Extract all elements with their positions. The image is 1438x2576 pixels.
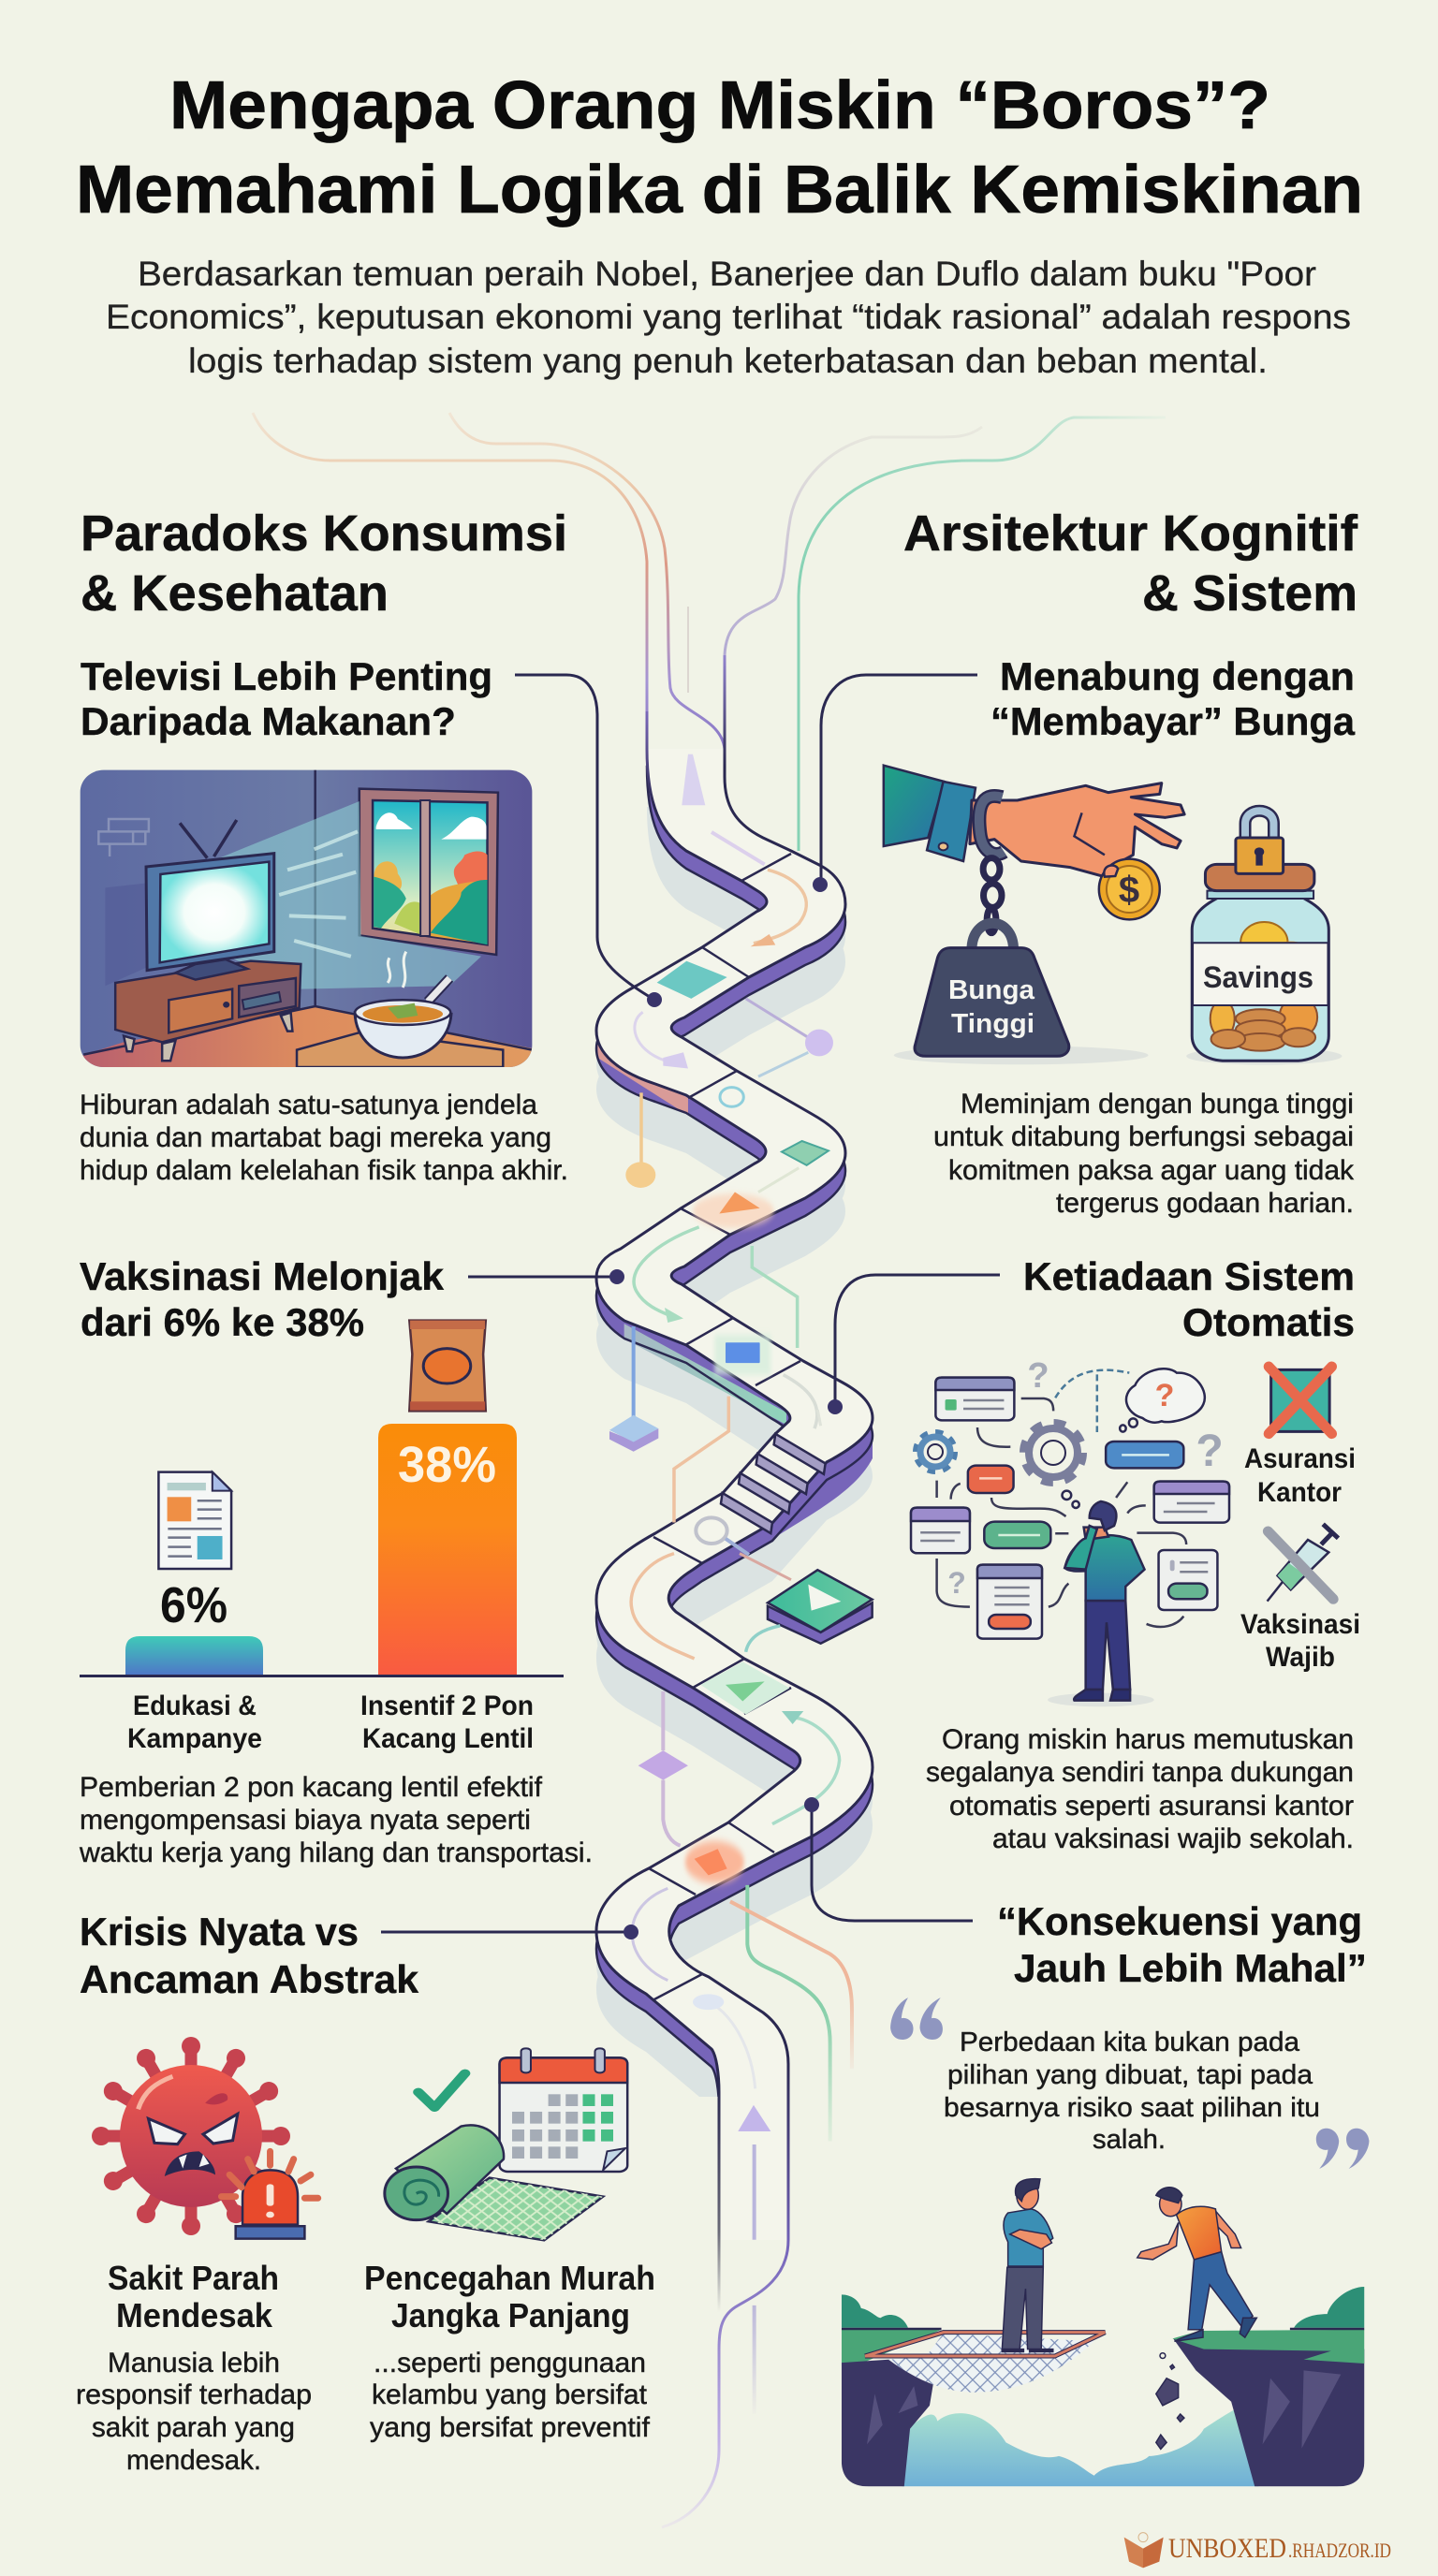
heading: konsekuensi — [997, 1899, 1367, 1990]
bar chart — [80, 1424, 564, 1754]
connector strokes — [937, 1398, 1186, 1627]
value: 38 percent: 38% — [398, 1437, 496, 1493]
text: hiburan: hidup dalam kelelahan fisik tanpa akhir. — [80, 1155, 568, 1186]
safety net — [865, 2333, 1105, 2393]
labels: asuransi and vaksinasi: Wajib — [1266, 1642, 1335, 1673]
illustration: person surrounded by decisions — [911, 1356, 1338, 1706]
text: meminjam: untuk ditabung berfungsi sebagai — [933, 1121, 1354, 1152]
chain — [983, 858, 1002, 933]
falling rocks — [1156, 2353, 1184, 2449]
bar labels — [127, 1690, 534, 1754]
teal tile — [657, 961, 727, 999]
text: pencegahan: Jangka Panjang — [391, 2296, 630, 2334]
label: bunga tinggi: Tinggi — [951, 1009, 1034, 1039]
heading: ketiadaan: Otomatis — [1182, 1300, 1355, 1344]
heading: televisi: Daripada Makanan? — [81, 699, 456, 743]
card left — [911, 1508, 970, 1553]
orange trace — [730, 1901, 852, 2069]
text: pencegahan: yang bersifat preventif — [370, 2412, 651, 2443]
lavender curved arrow — [635, 1012, 688, 1069]
section heading: left: & Kesehatan — [81, 565, 389, 622]
illustration: hand with weight and coin — [884, 766, 1184, 1064]
road shadow — [596, 798, 873, 2097]
bar: insentif — [378, 1424, 517, 1676]
question marks: ? — [1155, 1378, 1174, 1413]
text: sakit parah: Manusia lebih — [108, 2348, 280, 2378]
icon: calendar — [500, 2048, 627, 2172]
card — [935, 1378, 1014, 1420]
illustration: safety net versus cliff — [842, 2179, 1364, 2486]
quote text: besarnya risiko saat pilihan itu — [944, 2093, 1320, 2123]
left grass — [842, 2330, 942, 2365]
road tile lines — [649, 854, 800, 2000]
man standing on net — [1002, 2179, 1053, 2351]
text: hiburan: Hiburan adalah satu-satunya jendela — [80, 1090, 537, 1120]
crossed out insurance card — [1269, 1367, 1332, 1434]
orange pin — [625, 1092, 655, 1188]
blue tile — [714, 1335, 770, 1375]
play tile — [768, 1570, 873, 1644]
illustration: tv room — [81, 770, 532, 1067]
quote text: pilihan yang dibuat, tapi pada — [947, 2060, 1313, 2090]
icon: lentil packet — [409, 1321, 486, 1411]
quote text: salah. — [1093, 2125, 1166, 2155]
heading: ketiadaan: Ketiadaan Sistem — [1023, 1254, 1355, 1298]
question marks: ? — [947, 1566, 966, 1600]
text: pemberian: mengompensasi biaya nyata seperti — [80, 1805, 531, 1836]
stairs — [721, 1434, 826, 1533]
lavender up arrow — [693, 1994, 770, 2414]
text: meminjam: Meminjam dengan bunga tinggi — [961, 1089, 1354, 1120]
card lower left — [977, 1565, 1042, 1639]
section heading: right — [903, 505, 1358, 622]
window — [360, 789, 498, 955]
card lower right — [1159, 1550, 1217, 1610]
green tile — [700, 1661, 789, 1714]
green pill — [984, 1522, 1050, 1548]
text: pencegahan: ...seperti penggunaan — [374, 2348, 646, 2378]
quote text: Perbedaan kita bukan pada — [960, 2027, 1300, 2057]
label: bunga tinggi: Bunga — [948, 975, 1035, 1005]
right trees — [1294, 2287, 1364, 2328]
logo: .RHADZOR.ID — [1288, 2539, 1391, 2562]
red pill — [968, 1466, 1014, 1493]
road decorations upper — [609, 754, 833, 1555]
heading: vaksinasi: dari 6% ke 38% — [81, 1300, 364, 1344]
subtitle: logis terhadap sistem yang penuh keterbatasan dan beban mental. — [188, 342, 1268, 380]
green curved arrow — [634, 1227, 699, 1323]
illustration: locked savings jar — [1186, 811, 1342, 1065]
text: pemberian: Pemberian 2 pon kacang lentil efektif — [80, 1772, 543, 1803]
labels: asuransi and vaksinasi: Vaksinasi — [1240, 1609, 1360, 1640]
orange arrow — [751, 870, 806, 946]
flowing lines into the road — [253, 413, 1166, 851]
gears — [917, 1424, 1082, 1482]
text: pencegahan: Pencegahan Murah — [364, 2259, 655, 2297]
right cliff — [1173, 2338, 1364, 2486]
winding road path — [596, 655, 873, 2527]
lavender node — [746, 999, 833, 1076]
text: meminjam: tergerus godaan harian. — [1056, 1188, 1354, 1219]
orange glow tile — [685, 1841, 744, 1883]
heading: krisis: Ancaman Abstrak — [80, 1957, 419, 2001]
section heading: left — [81, 505, 567, 622]
text: pemberian — [79, 1772, 593, 1868]
man stepping off cliff — [1137, 2188, 1256, 2341]
tv — [180, 820, 237, 858]
blue pill — [1106, 1442, 1183, 1468]
subtitle: Economics”, keputusan ekonomi yang terlihat “tidak rasional” adalah respons — [106, 298, 1351, 336]
labels: asuransi and vaksinasi: Asuransi — [1244, 1443, 1356, 1474]
road edges — [596, 655, 873, 2527]
floor shadow — [894, 1046, 1149, 1064]
bar labels: Edukasi & — [133, 1690, 257, 1721]
left trees — [842, 2294, 908, 2328]
icon: siren — [221, 2151, 318, 2239]
text: meminjam — [933, 1089, 1355, 1219]
heading: vaksinasi — [80, 1254, 445, 1344]
handcuff — [979, 796, 1004, 854]
text: hiburan — [80, 1090, 568, 1186]
text: orang miskin: Orang miskin harus memutuskan — [942, 1724, 1354, 1755]
left cliff — [842, 2360, 933, 2486]
green up arrow — [772, 1711, 840, 1824]
bar labels: Insentif 2 Pon — [360, 1690, 534, 1721]
sleeve — [884, 766, 945, 846]
text: orang miskin: atau vaksinasi wajib sekolah. — [992, 1823, 1354, 1854]
label: savings: Savings — [1203, 960, 1313, 994]
text: sakit parah: responsif terhadap — [76, 2379, 312, 2410]
icon: check mark — [418, 2073, 465, 2108]
icon: dollar sign: $ — [1119, 870, 1139, 911]
hills — [902, 2409, 1258, 2486]
heading: vaksinasi: Vaksinasi Melonjak — [80, 1254, 445, 1298]
title — [76, 68, 1363, 227]
text: sakit parah — [76, 2259, 312, 2476]
cabinet — [115, 961, 301, 1042]
axis — [80, 1675, 564, 1677]
heading: menabung: Menabung dengan — [1000, 654, 1355, 698]
text: orang miskin — [926, 1724, 1354, 1854]
icon: book — [1124, 2533, 1164, 2568]
text: pencegahan — [364, 2259, 655, 2443]
text: orang miskin: otomatis seperti asuransi kantor — [949, 1791, 1354, 1822]
thought cloud — [1120, 1368, 1205, 1432]
heading: konsekuensi: “Konsekuensi yang — [997, 1899, 1362, 1943]
table and bowl — [297, 1032, 503, 1067]
lavender diamond pin — [638, 1691, 688, 1846]
heading: menabung — [990, 654, 1356, 743]
weight — [972, 923, 1014, 950]
orange triangle — [693, 1193, 774, 1228]
text: orang miskin: segalanya sendiri tanpa dukungan — [926, 1757, 1354, 1788]
card right — [1154, 1482, 1229, 1523]
text: sakit parah: sakit parah yang — [92, 2412, 295, 2443]
magnifier — [696, 1517, 749, 1555]
bar: edukasi — [125, 1636, 263, 1676]
text: meminjam: komitmen paksa agar uang tidak — [948, 1155, 1355, 1186]
green tile — [782, 1141, 829, 1165]
lavender arrow — [682, 754, 765, 864]
teal ring — [720, 1088, 743, 1106]
hand — [970, 783, 1184, 877]
section heading: left: Paradoks Konsumsi — [81, 505, 567, 562]
label: bunga tinggi — [948, 975, 1035, 1039]
text: pemberian: waktu kerja yang hilang dan transportasi. — [79, 1837, 593, 1868]
road side wall — [596, 766, 873, 2258]
heading: konsekuensi: Jauh Lebih Mahal” — [1014, 1946, 1367, 1990]
heading: ketiadaan — [1023, 1254, 1355, 1344]
road decorations lower — [631, 1554, 873, 2414]
icon: document — [158, 1472, 231, 1569]
logo: UNBOXED — [1168, 2533, 1286, 2564]
closing quote mark — [1316, 2129, 1369, 2169]
text: pencegahan: kelambu yang bersifat — [372, 2379, 648, 2410]
text: hiburan: dunia dan martabat bagi mereka yang — [80, 1122, 551, 1153]
labels: asuransi and vaksinasi — [1240, 1443, 1360, 1673]
logo — [1124, 2533, 1391, 2568]
heading: menabung: “Membayar” Bunga — [990, 699, 1356, 743]
connector dots — [609, 877, 843, 1939]
title: Mengapa Orang Miskin “Boros”? — [169, 68, 1270, 143]
blue pin — [609, 1326, 658, 1452]
question marks: ? — [1196, 1427, 1224, 1476]
question marks — [947, 1356, 1224, 1600]
text: sakit parah: Sakit Parah — [108, 2259, 279, 2297]
question marks: ? — [1027, 1356, 1049, 1396]
bar labels: Kacang Lentil — [362, 1723, 534, 1754]
bar labels: Kampanye — [127, 1723, 262, 1754]
value: 6 percent: 6% — [160, 1577, 227, 1633]
labels: asuransi and vaksinasi: Kantor — [1257, 1477, 1342, 1508]
crossed out syringe — [1268, 1524, 1338, 1602]
heading: televisi: Televisi Lebih Penting — [81, 654, 492, 698]
heading: krisis: Krisis Nyata vs — [80, 1910, 359, 1954]
section heading: right: Arsitektur Kognitif — [903, 505, 1358, 562]
subtitle — [106, 255, 1351, 380]
section heading: right: & Sistem — [1142, 565, 1357, 622]
padlock — [1245, 811, 1273, 840]
road surface — [596, 749, 873, 2240]
title: Memahami Logika di Balik Kemiskinan — [76, 153, 1363, 227]
opening quote mark — [890, 1998, 943, 2040]
text: sakit parah: Mendesak — [116, 2296, 273, 2334]
light beam — [204, 801, 481, 989]
connectors — [381, 675, 1000, 1932]
blue and orange trace — [740, 1554, 791, 1580]
icon: bed net roll — [385, 2125, 603, 2240]
icon: virus — [92, 2037, 290, 2235]
right grass — [1172, 2330, 1364, 2364]
quote text — [944, 2027, 1320, 2155]
orange curve — [631, 1554, 695, 1659]
text: sakit parah: mendesak. — [126, 2445, 261, 2476]
coin — [1099, 859, 1160, 919]
heading: krisis — [80, 1910, 419, 2001]
green trace — [747, 1885, 830, 2141]
subtitle: Berdasarkan temuan peraih Nobel, Banerjee dan Duflo dalam buku "Poor — [138, 255, 1316, 293]
heading: televisi — [81, 654, 492, 743]
thinking man — [1048, 1501, 1154, 1706]
